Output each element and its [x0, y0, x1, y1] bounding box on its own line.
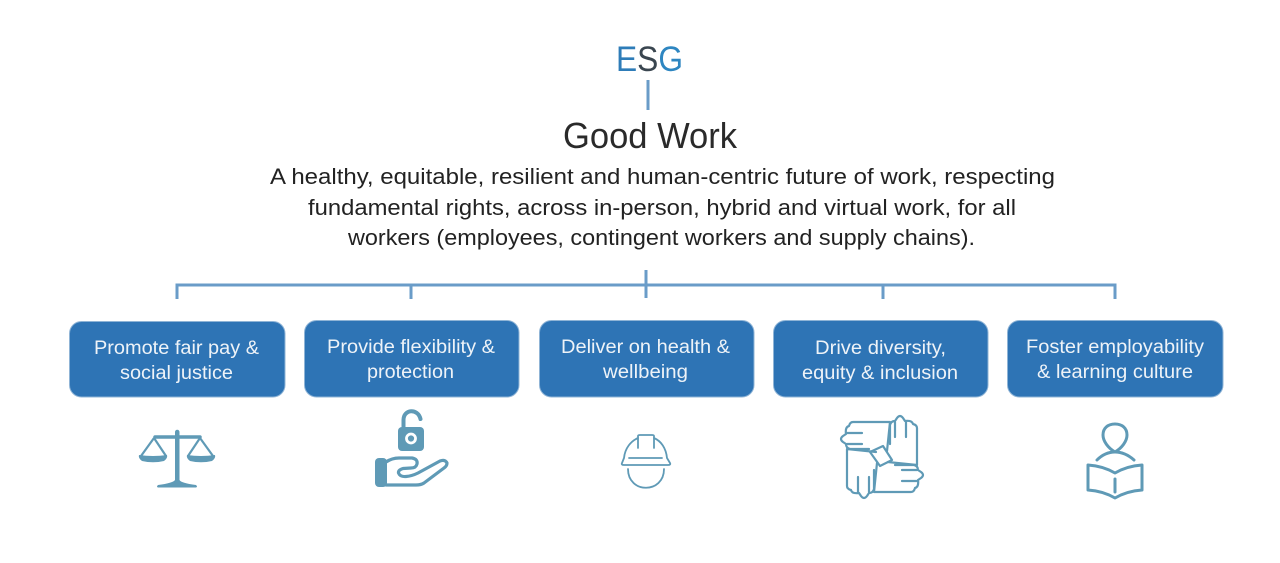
panel: promote fair pay [70, 322, 285, 397]
panel: diversity equity inclusion [774, 320, 988, 397]
text block: definition: A healthy, equitable, resilient and human-centric future of work, respecting [270, 164, 1055, 189]
panel: provide flexibility [304, 320, 519, 397]
panel: promote fair pay: Promote fair pay & [94, 338, 259, 359]
panel: provide flexibility: Provide flexibility & [327, 337, 495, 358]
heading: Good Work: Good Work [563, 115, 738, 156]
icon: open lock on hand [375, 411, 447, 487]
panel: health and wellbeing: Deliver on health & [561, 337, 730, 358]
panel: employability and learning [1008, 320, 1223, 397]
connector: ESG to Good Work [646, 80, 650, 110]
icon: hard hat [622, 435, 670, 488]
panel: diversity equity inclusion: Drive diversity, [815, 338, 946, 359]
text block: definition: fundamental rights, across in-person, hybrid and virtual work, for all [308, 195, 1016, 220]
icon: person reading book [1088, 424, 1142, 498]
panel: employability and learning: Foster employability [1026, 337, 1205, 358]
panel: health and wellbeing [540, 320, 754, 397]
panel: diversity equity inclusion: equity & inclusion [802, 363, 958, 384]
panel: provide flexibility: protection [367, 362, 454, 383]
title: ESG: ESG [616, 40, 683, 79]
panel: employability and learning: & learning culture [1037, 362, 1193, 383]
connector: tree branching to five pillars [177, 270, 1115, 299]
text block: definition: workers (employees, contingent workers and supply chains). [347, 225, 975, 250]
icon: scales of justice [139, 430, 215, 488]
icon: four linked hands [841, 416, 923, 498]
panel: promote fair pay: social justice [120, 363, 233, 384]
panel: health and wellbeing: wellbeing [602, 362, 688, 383]
text block: definition [270, 164, 1055, 250]
